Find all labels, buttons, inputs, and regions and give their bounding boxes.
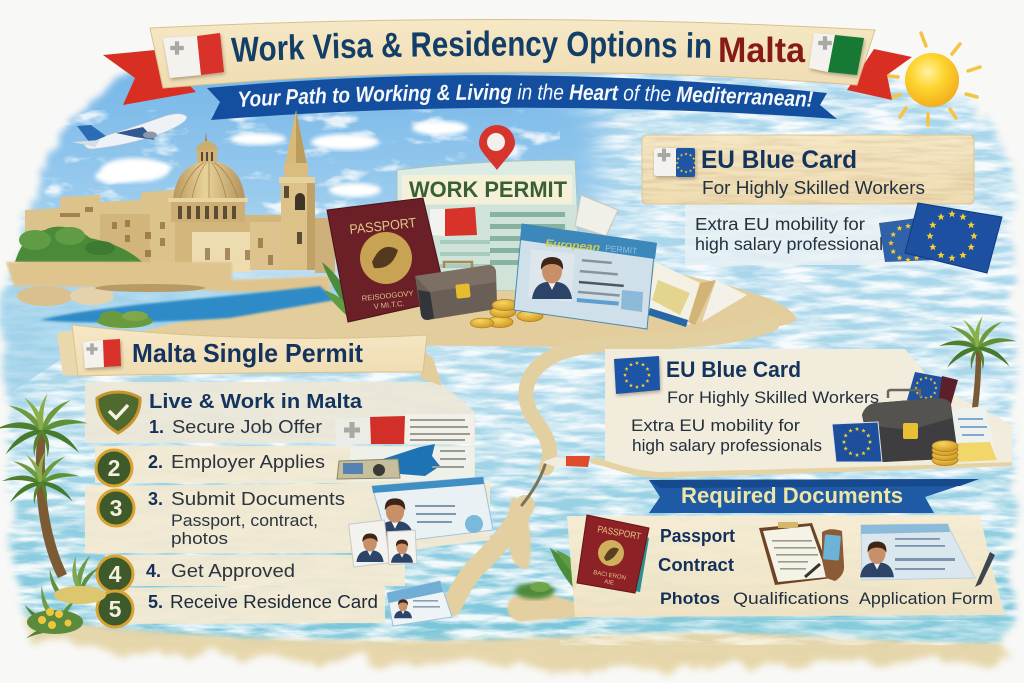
step 3: photos bbox=[171, 530, 228, 548]
subtitle ribbon bbox=[207, 75, 837, 120]
description: Extra EU mobility for bbox=[631, 416, 800, 435]
step 4 badge bbox=[97, 556, 133, 592]
application form and camera bbox=[337, 444, 474, 481]
step 5 badge bbox=[97, 591, 133, 627]
pen bbox=[975, 552, 995, 587]
subheading: For Highly Skilled Workers bbox=[667, 388, 879, 407]
airplane bbox=[72, 114, 187, 149]
step bands bbox=[85, 382, 490, 624]
step 2 badge: 2 bbox=[108, 455, 120, 481]
title text: Work Visa & Residency Options in bbox=[230, 30, 710, 64]
folded papers and leaves bbox=[648, 262, 747, 327]
step 3 badge: 3 bbox=[110, 495, 122, 521]
Application Form: Application Form bbox=[859, 589, 993, 608]
Qualifications: Qualifications bbox=[733, 589, 849, 608]
flag: EU bbox=[614, 356, 660, 394]
heading: EU Blue Card: EU Blue Card bbox=[701, 146, 857, 174]
sand island beach bbox=[140, 268, 797, 347]
passport bbox=[327, 198, 447, 322]
description: high salary professionals bbox=[632, 436, 822, 455]
European permit ID card bbox=[514, 224, 657, 329]
rocks bbox=[17, 284, 205, 306]
title word Malta: Malta bbox=[718, 31, 806, 70]
palm leaves by documents bbox=[550, 548, 578, 590]
job offer document bbox=[335, 414, 474, 445]
panel: Required Documents bbox=[567, 479, 1005, 617]
heading ribbon bbox=[649, 479, 979, 513]
panel: EU Blue Card top bbox=[642, 135, 974, 265]
left red ribbon tail bbox=[103, 50, 196, 105]
sand shore below documents bbox=[507, 594, 600, 622]
residence ID card with photos bbox=[349, 477, 493, 567]
Valletta skyline bbox=[0, 110, 1017, 638]
briefcase bbox=[888, 390, 920, 398]
step 2: Employer Applies bbox=[171, 452, 325, 472]
flag: Malta and EU bbox=[654, 148, 697, 177]
step 3: 3. bbox=[148, 489, 163, 509]
photo woman bbox=[387, 530, 417, 565]
flag: Malta right bbox=[809, 33, 864, 75]
passport small text: REISOOGOVY bbox=[361, 289, 414, 303]
shrub on shore bbox=[97, 311, 153, 328]
banner title: Malta Single Permit bbox=[132, 338, 363, 368]
paper form bbox=[950, 406, 997, 462]
right red ribbon tail bbox=[847, 49, 912, 100]
passport: V MI.T.C. bbox=[373, 299, 405, 311]
step 5: Receive Residence Card bbox=[170, 592, 378, 612]
step 2: 2. bbox=[148, 452, 163, 472]
step 4: 4. bbox=[146, 561, 161, 581]
step 4 badge: 4 bbox=[109, 561, 122, 587]
ID card heading: European bbox=[545, 238, 600, 254]
cathedral dome bbox=[168, 132, 248, 222]
flag: Malta left bbox=[163, 33, 224, 78]
step 5: 5. bbox=[148, 592, 163, 612]
passport label: PASSPORT bbox=[349, 215, 417, 237]
briefcase bbox=[415, 262, 497, 320]
shield check icon bbox=[97, 392, 140, 433]
marker pencil bbox=[542, 456, 590, 467]
phone in leather case bbox=[822, 529, 844, 581]
sandstone bastion wall bbox=[6, 262, 330, 292]
passport small text: BACI ERON bbox=[593, 570, 626, 582]
residence card small bbox=[387, 581, 452, 626]
step 3 badge bbox=[98, 490, 134, 526]
EU briefcase stack bbox=[832, 372, 997, 466]
sun with rays bbox=[889, 33, 980, 125]
work permit heading: WORK PERMIT bbox=[409, 177, 568, 202]
subtitle text: Your Path to Working & Living in the Heart of the Mediterranean! bbox=[238, 84, 814, 107]
panel: EU Blue Card lower bbox=[605, 349, 1012, 474]
shore plant near documents bbox=[515, 582, 555, 599]
ferns and yellow flowers bbox=[21, 553, 106, 638]
documents list bbox=[658, 526, 993, 608]
EU folder bbox=[832, 422, 882, 462]
clipboard bbox=[759, 522, 832, 585]
panel: Malta Single Permit steps bbox=[57, 325, 493, 627]
leaves beside passport bbox=[322, 262, 350, 315]
heading text: Required Documents bbox=[681, 483, 903, 508]
application form card bbox=[860, 524, 975, 580]
Contract: Contract bbox=[658, 555, 734, 575]
EU flags folder pair bbox=[879, 203, 1002, 273]
flag: Malta bbox=[83, 339, 121, 368]
banner: Malta Single Permit bbox=[57, 325, 442, 386]
European permit ID card: PERMIT bbox=[605, 243, 638, 256]
heading: EU Blue Card: EU Blue Card bbox=[666, 357, 801, 382]
church bell tower bbox=[279, 110, 315, 270]
palm trunk bbox=[36, 430, 67, 578]
step 5 badge: 5 bbox=[109, 596, 122, 622]
small paper behind permit card bbox=[575, 195, 618, 236]
green trees bbox=[15, 227, 142, 262]
subheading: For Highly Skilled Workers bbox=[702, 178, 925, 198]
palm tree right bbox=[939, 315, 1017, 408]
palm trees left bbox=[0, 393, 88, 578]
sand lobe behind documents bbox=[507, 497, 531, 569]
title banner bbox=[149, 19, 876, 88]
photo man bbox=[349, 520, 390, 567]
palm crowns bbox=[0, 393, 88, 457]
coins bbox=[932, 454, 958, 466]
step 3: Passport, contract, bbox=[171, 512, 318, 530]
passport red bbox=[577, 515, 649, 593]
description: high salary professionals bbox=[695, 234, 892, 254]
passport label: PASSPORT bbox=[596, 524, 642, 543]
step 2 badge bbox=[96, 450, 132, 486]
work permit document bbox=[397, 160, 577, 290]
Passport: Passport bbox=[660, 526, 735, 546]
step 4: Get Approved bbox=[171, 561, 295, 581]
step 3 bbox=[148, 489, 345, 548]
heading: Live and Work: Live & Work in Malta bbox=[149, 391, 363, 413]
blue harbour water bbox=[40, 286, 335, 323]
sand stripe under blue card panel bbox=[590, 457, 1012, 478]
gold coins bbox=[470, 300, 543, 328]
Photos: Photos bbox=[660, 589, 720, 608]
EU passports bbox=[907, 372, 947, 404]
step 1: Secure Job Offer bbox=[172, 417, 322, 437]
passport red: AIE bbox=[604, 579, 614, 587]
location pin bbox=[479, 125, 515, 170]
step 3: Submit Documents bbox=[171, 489, 345, 509]
description: Extra EU mobility for bbox=[695, 214, 865, 234]
step 1: 1. bbox=[149, 417, 164, 437]
winding sand path bbox=[452, 324, 772, 606]
